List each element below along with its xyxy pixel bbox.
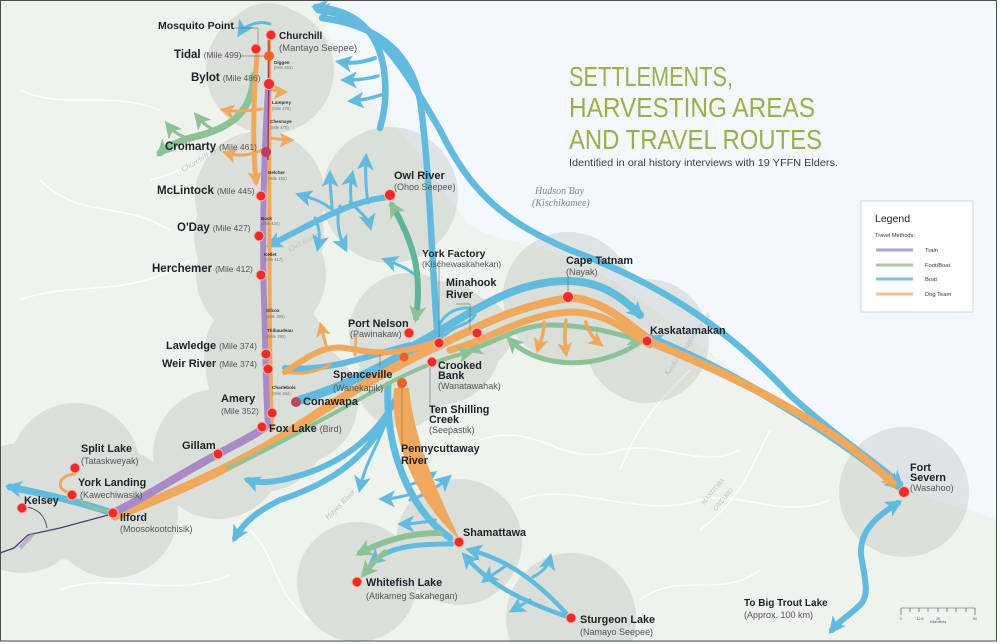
settlement labels: Shamattawa — [463, 527, 527, 539]
scale bar: 0 — [900, 617, 902, 621]
scale bar: 12.5 — [917, 617, 923, 621]
settlement labels: Chesnaye — [270, 119, 292, 124]
title: HARVESTING AREAS — [569, 92, 815, 123]
settlement labels: Belcher — [268, 170, 285, 175]
hudson bay label: Hudson Bay — [534, 186, 585, 197]
settlement labels: To Big Trout Lake — [744, 598, 828, 609]
settlement labels: Bank — [438, 370, 465, 382]
settlement labels: (Mile 364) — [272, 391, 291, 396]
settlement labels: Lawledge (Mile 374) — [166, 340, 257, 352]
scale bar — [900, 608, 977, 624]
settlement labels: Fort — [910, 462, 931, 474]
settlement labels: Split Lake — [81, 443, 132, 455]
settlement labels: Bylot (Mile 486) — [191, 72, 261, 84]
settlement labels: (Wanekapik) — [333, 383, 383, 393]
settlement labels: Kelsey — [24, 495, 59, 507]
settlement labels: Severn — [910, 472, 946, 484]
legend: Boat — [925, 277, 937, 283]
river name labels: Hayes River — [322, 487, 358, 522]
leader lines — [232, 28, 568, 445]
train route — [0, 40, 269, 553]
settlement labels: Herchemer (Mile 412) — [152, 263, 253, 275]
settlement labels: (Tataskweyak) — [81, 456, 139, 466]
settlement labels: Silcox — [266, 308, 280, 313]
settlement labels: (Mile 470) — [270, 125, 289, 130]
scale bar: 25 — [936, 617, 940, 621]
settlement labels: (Ohoo Seepee) — [394, 182, 456, 192]
settlement labels: O'Day (Mile 427) — [177, 222, 251, 234]
settlement labels: Charlebois — [272, 385, 296, 390]
legend: Travel Methods: — [875, 233, 915, 239]
legend: Legend — [875, 213, 910, 225]
settlement labels: (Mile 399) — [266, 314, 285, 319]
settlement labels: Port Nelson — [348, 318, 409, 330]
settlement labels: McLintock (Mile 445) — [157, 185, 255, 197]
subtitle: Identified in oral history interviews with 19 YFFN Elders. — [569, 157, 838, 169]
title: AND TRAVEL ROUTES — [569, 124, 822, 155]
settlement labels: Weir River (Mile 374) — [162, 358, 257, 370]
settlement labels: Kellet — [264, 252, 277, 257]
settlement labels: (Kawechiwasik) — [80, 490, 143, 500]
settlement labels: Crooked — [438, 360, 482, 372]
settlement labels: Tidal (Mile 499) — [174, 49, 242, 61]
settlement labels: (Kischewaskahekan) — [422, 259, 501, 269]
settlement labels: Minahook — [446, 277, 497, 289]
settlement labels: Creek — [429, 414, 460, 426]
river name labels — [180, 141, 735, 522]
settlement labels: York Landing — [78, 477, 146, 489]
settlement labels: Whitefish Lake — [366, 577, 442, 589]
settlement labels: (Mantayo Seepee) — [279, 43, 357, 54]
settlement labels: River — [446, 289, 474, 301]
river name labels: Owl River — [287, 230, 321, 254]
settlement labels: Cape Tatnam — [566, 255, 633, 267]
settlement labels: (Mile 352) — [221, 406, 259, 416]
settlement labels: Owl River — [394, 170, 445, 182]
settlement labels: (Mile 493) — [274, 65, 293, 70]
settlement labels: Kaskatamakan — [650, 325, 726, 337]
settlement labels: (Mile 452) — [268, 176, 287, 181]
river name labels: MANITOBA — [700, 477, 726, 507]
settlement labels: (Nayak) — [566, 267, 598, 277]
corridor foot route — [228, 352, 470, 468]
settlement labels: York Factory — [422, 248, 486, 260]
settlement labels: (Wanatawahak) — [438, 381, 501, 391]
settlement labels: Fox Lake (Bird) — [269, 423, 342, 435]
settlement labels: (Mile 390) — [267, 334, 286, 339]
legend: Dog Team — [925, 292, 951, 298]
river name labels: Churchill River — [180, 141, 228, 174]
river name labels: Kaskattamagan Seepee — [662, 311, 713, 378]
settlement labels: Churchill — [279, 31, 323, 42]
hudson bay label: (Kischikamee) — [532, 198, 590, 209]
legend — [861, 201, 973, 312]
settlement labels: Sturgeon Lake — [580, 614, 655, 626]
settlement labels: Mosquito Point — [158, 20, 234, 32]
settlement labels: (Mile 417) — [264, 257, 283, 262]
settlement labels: Back — [261, 216, 272, 221]
settlement labels: (Moosokootchisik) — [120, 524, 193, 534]
settlement labels: (Mile 434) — [261, 221, 280, 226]
settlement labels: Conawapa — [303, 396, 359, 408]
title: SETTLEMENTS, — [569, 61, 733, 92]
settlement labels: Amery — [221, 393, 256, 405]
settlement labels: (Wasahoo) — [910, 483, 954, 493]
settlement labels: Gillam — [182, 440, 216, 452]
settlement labels: (Namayo Seepee) — [580, 627, 653, 637]
dog team routes — [60, 40, 893, 540]
settlement labels: (Seepastik) — [429, 425, 475, 435]
settlement labels: Ten Shilling — [429, 404, 489, 416]
foot and boat routes — [80, 75, 640, 574]
settlement labels: Spenceville — [333, 369, 392, 381]
settlement labels: Diggen — [274, 60, 290, 65]
settlement labels: Thibaudeau — [267, 328, 293, 333]
legend: Train — [925, 248, 938, 254]
settlement labels: (Approx. 100 km) — [744, 610, 813, 620]
settlement labels: Pennycuttaway — [401, 443, 480, 455]
settlement labels: (Pawinakaw) — [350, 329, 402, 339]
settlement labels: River — [401, 455, 429, 467]
settlement labels: (Atikameg Sakahegan) — [366, 591, 458, 601]
settlement labels: Cromarty (Mile 461) — [165, 141, 257, 153]
scale bar: Kilometres — [930, 620, 947, 624]
legend: Foot/Boat — [925, 263, 951, 269]
settlement labels: Ilford — [120, 512, 147, 524]
settlement labels: (Mile 476) — [272, 106, 291, 111]
river name labels: ONTARIO — [712, 487, 735, 512]
scale bar: 50 — [973, 617, 977, 621]
settlement labels: Lamprey — [272, 100, 292, 105]
faint rivers and terrain lines — [20, 90, 830, 620]
